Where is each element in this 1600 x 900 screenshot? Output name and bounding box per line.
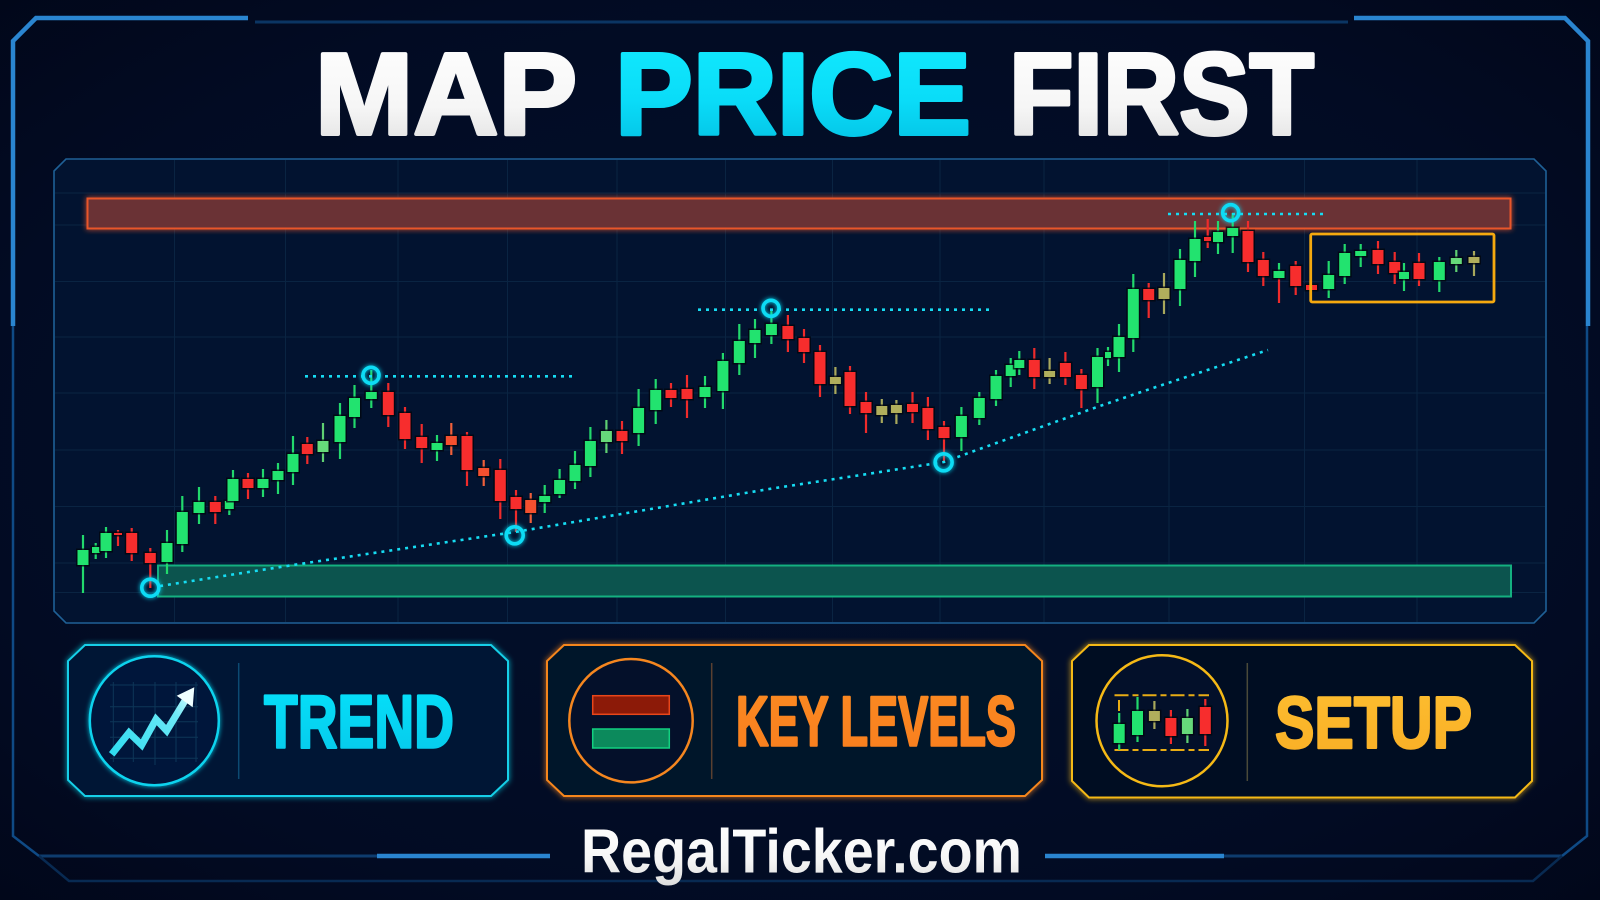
setup box: [1311, 234, 1494, 302]
icon: consolidation candles: [1096, 655, 1228, 786]
title: FIRST: [1009, 29, 1314, 159]
label: trend: TREND: [264, 680, 454, 764]
support zone: [158, 566, 1511, 596]
chart grid: [55, 160, 1545, 622]
chart panel frame: [54, 159, 1546, 623]
label: setup: SETUP: [1275, 681, 1472, 764]
swing high levels: [305, 214, 1327, 376]
footer: website: RegalTicker.com: [581, 818, 1022, 887]
resistance zone: [88, 198, 1510, 228]
title: PRICE: [615, 29, 971, 159]
title: MAP: [315, 29, 577, 159]
title: [315, 29, 1314, 159]
candlestick series: [78, 213, 1480, 593]
panel: price chart: [54, 159, 1546, 623]
pivot markers: [142, 205, 1239, 596]
icon: trend arrow: [90, 656, 219, 785]
card: key levels: [547, 645, 1042, 796]
card: trend: [68, 645, 508, 796]
label: key levels: KEY LEVELS: [736, 682, 1016, 760]
icon: support and resistance bars: [569, 659, 693, 782]
card: setup: [1072, 645, 1532, 798]
rising trendline: [160, 350, 1268, 586]
